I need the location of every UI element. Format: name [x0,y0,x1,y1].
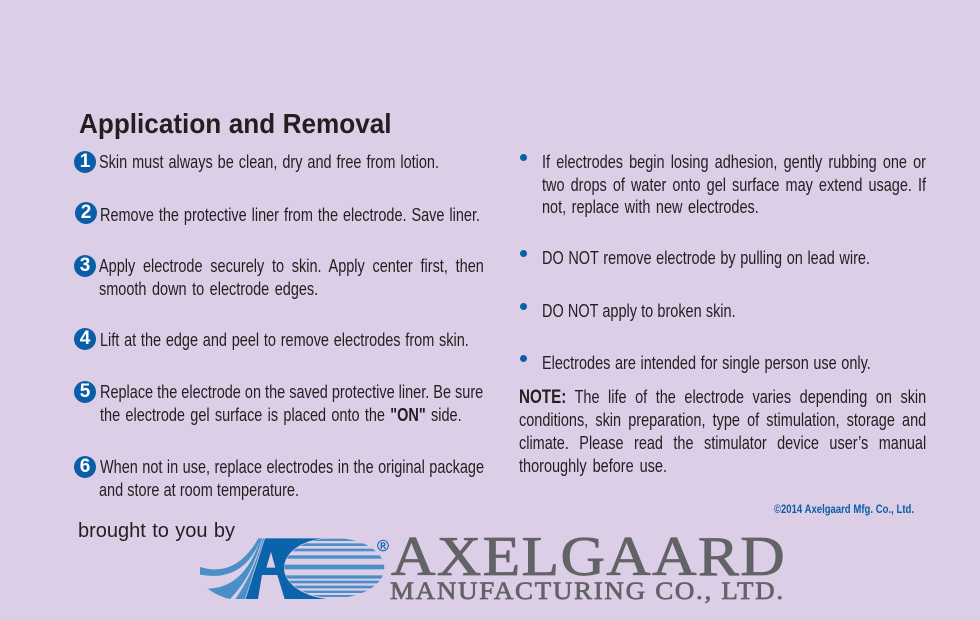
step 4: Lift at the edge and peel to remove electrodes from skin. [100,330,469,350]
step 3 [74,255,484,299]
step 3: 3 [80,255,90,276]
bullet: adhesion [520,152,926,217]
note: conditions, skin preparation, type of stimulation, storage and [519,410,926,430]
step 1: 1 [80,151,90,172]
step 6 [74,456,484,500]
step 4: 4 [80,328,90,349]
step 5 [74,381,483,425]
panel: bullet notes [520,152,926,373]
bullet: adhesion: two drops of water onto gel surface may extend usage. If [542,175,926,195]
step 2: Remove the protective liner from the electrode. Save liner. [100,205,480,225]
step 3: smooth down to electrode edges. [99,279,318,299]
step 6: When not in use, replace electrodes in the original package [100,457,484,477]
step 5: the electrode gel surface is placed onto the "ON" side. [100,405,462,425]
step 1: Skin must always be clean, dry and free from lotion. [99,152,439,172]
step 6: and store at room temperature. [99,480,299,500]
step 3: Apply electrode securely to skin. Apply center first, then [99,256,484,276]
step 5: 5 [80,381,90,402]
note [519,387,926,476]
stripes [280,539,387,597]
note: climate. Please read the stimulator device user’s manual [519,433,926,453]
panel: numbered steps [74,151,484,500]
registered mark: ® [377,538,389,555]
bullet: lead wire: DO NOT remove electrode by pulling on lead wire. [542,248,870,268]
logo mark [200,538,387,599]
bullet: broken skin: DO NOT apply to broken skin. [542,301,736,321]
dark ellipse and letter A [246,538,327,599]
brought to you by: brought to you by [78,520,235,542]
bullet: single person: Electrodes are intended for single person use only. [542,353,871,373]
title: Application and Removal [79,108,392,139]
note: NOTE: The life of the electrode varies depending on skin [519,387,926,408]
bullet: adhesion: not, replace with new electrodes. [542,197,759,217]
company name: MANUFACTURING CO., LTD. [390,577,783,605]
copyright: ©2014 Axelgaard Mfg. Co., Ltd. [774,502,914,516]
bullet: adhesion: If electrodes begin losing adhesion, gently rubbing one or [542,152,926,172]
note: thoroughly before use. [519,456,667,476]
step 5: Replace the electrode on the saved protective liner. Be sure [100,382,483,402]
company name: AXELGAARD [391,526,785,587]
step 6: 6 [80,456,90,477]
step 2: 2 [81,202,91,223]
swooshes [200,538,261,576]
